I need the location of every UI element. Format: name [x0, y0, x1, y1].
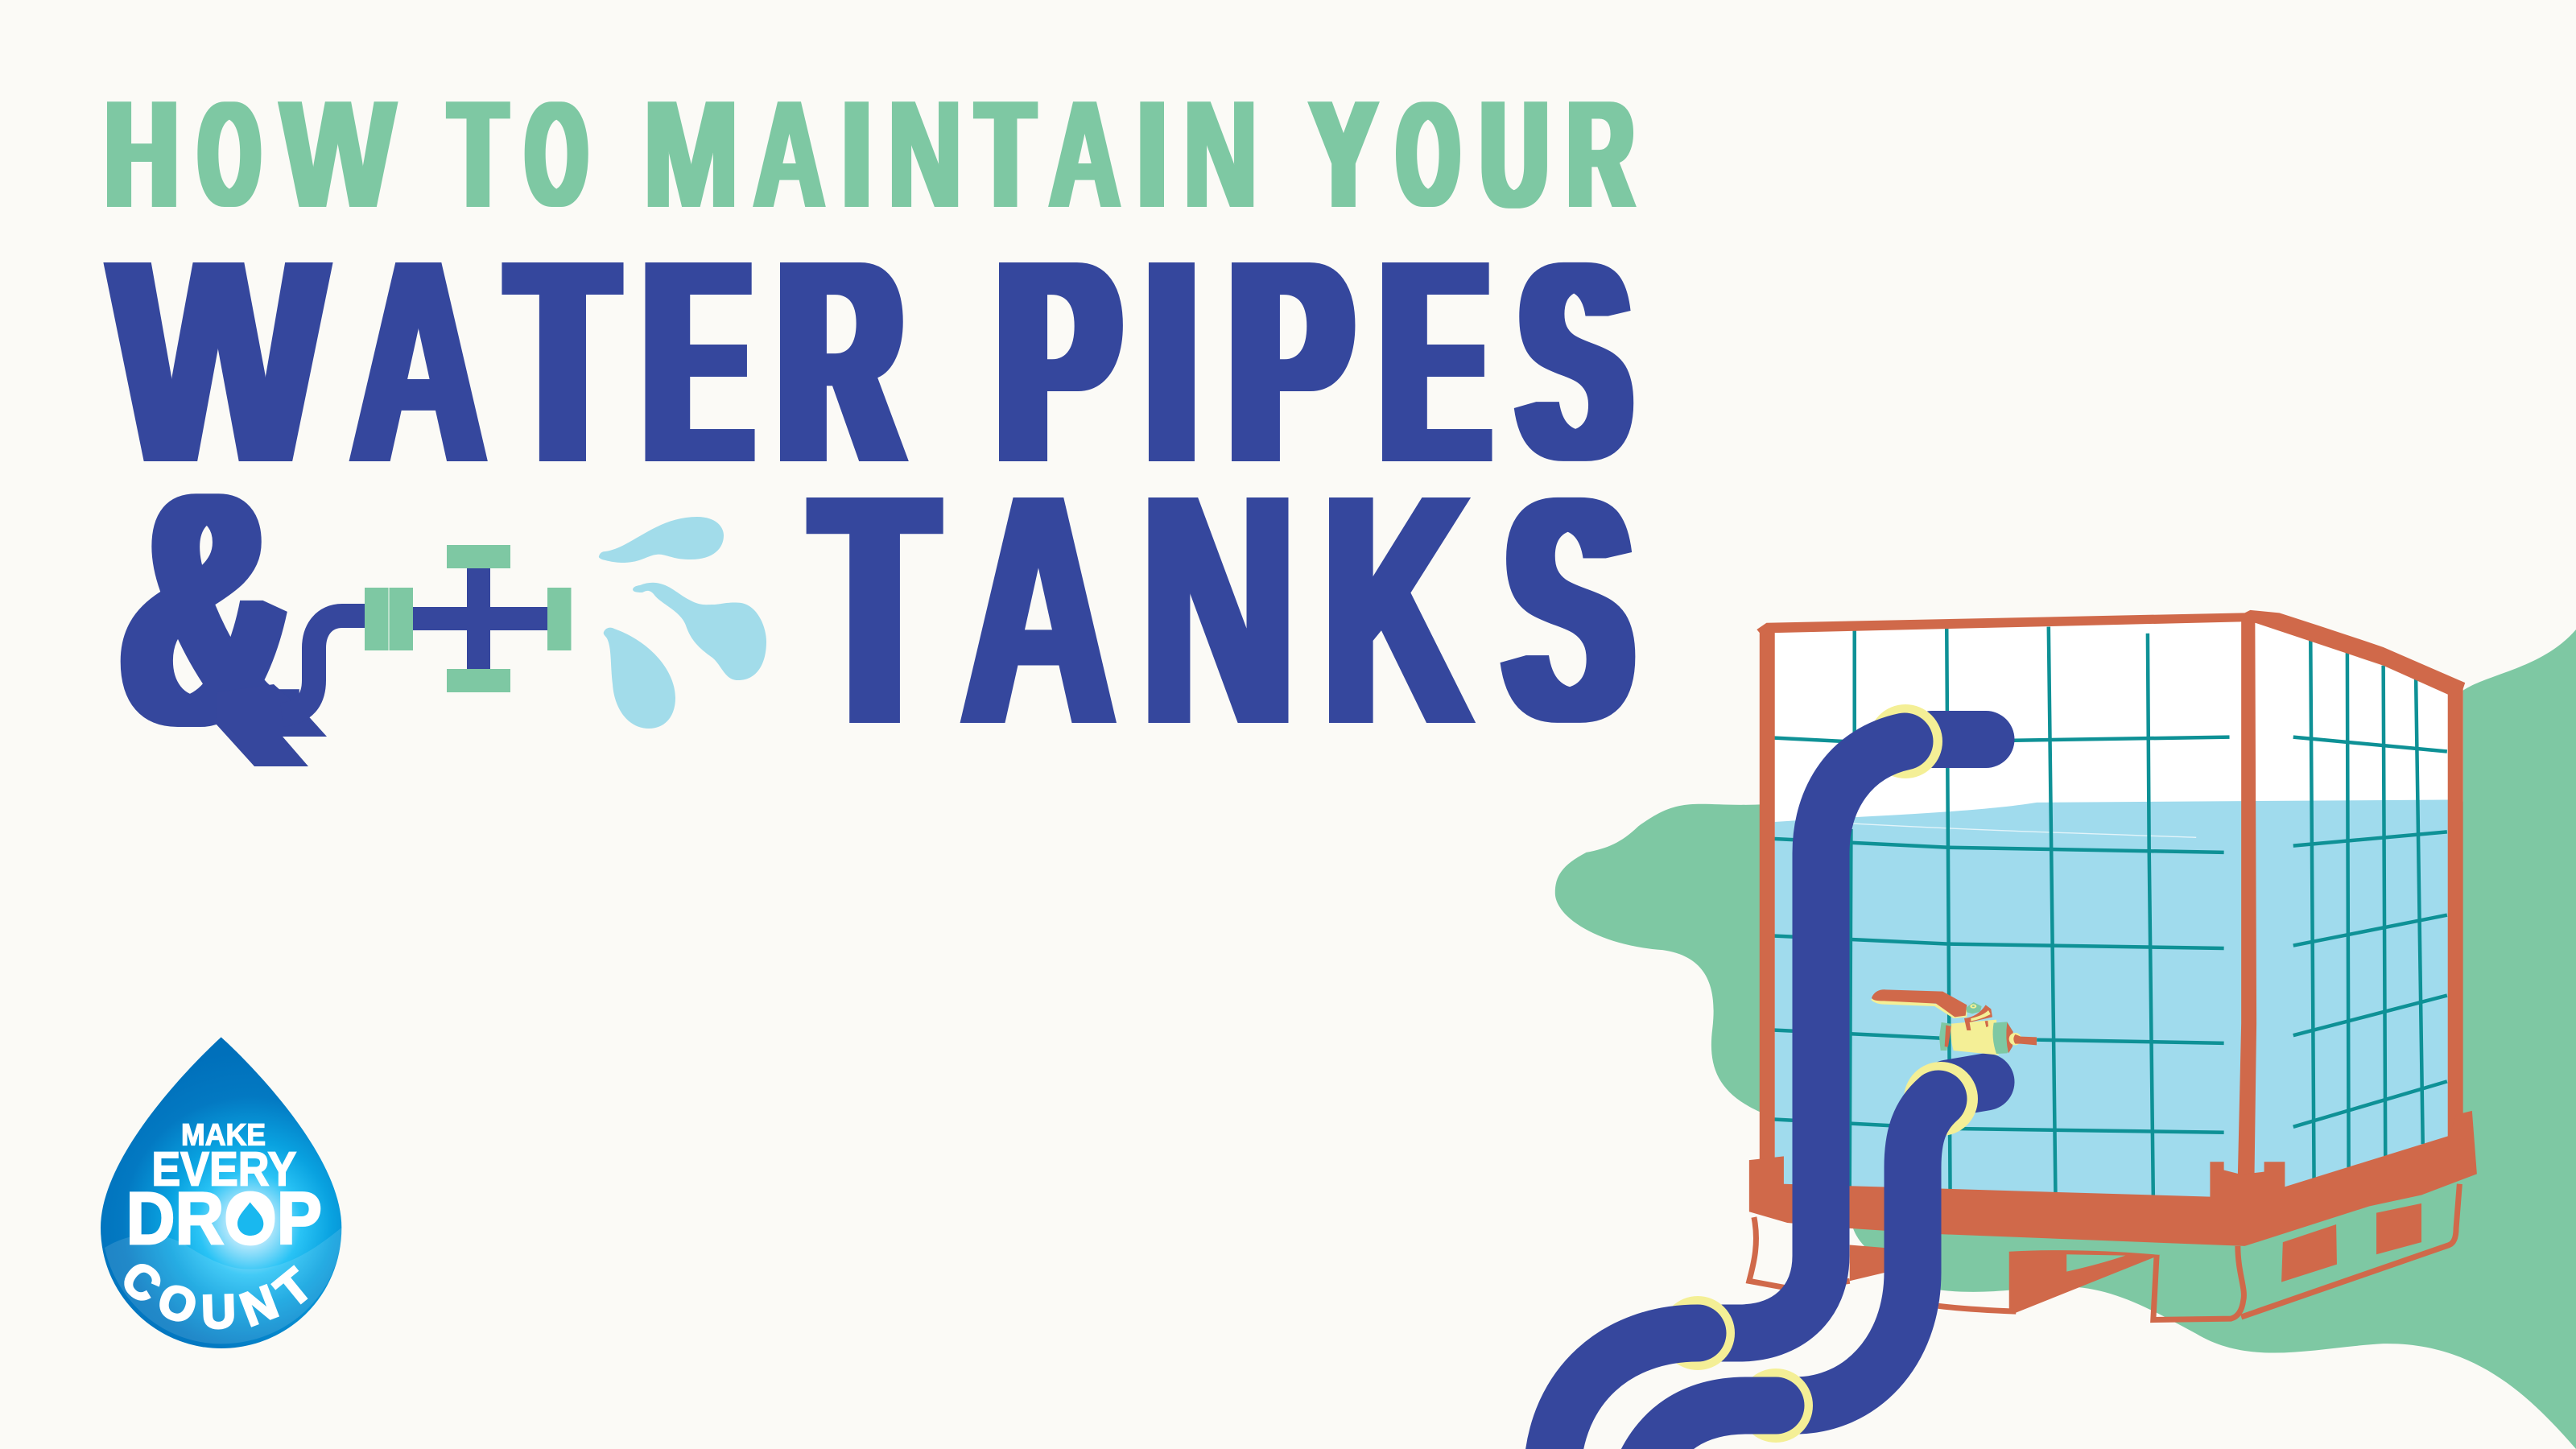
title: how to maintain your: R [1567, 69, 1633, 240]
water highlight [1853, 824, 2196, 837]
badge: make every drop count [101, 1037, 341, 1348]
title: how to maintain your: O [1397, 72, 1459, 237]
title: tanks [815, 426, 1631, 793]
tank white interior [1770, 618, 2449, 827]
illustration: tank and pipes [1552, 610, 2576, 1449]
tank frame and pallet [1749, 610, 2477, 1313]
pipe ring: valve side [1904, 1062, 1978, 1136]
pipe ring: upper [1868, 704, 1942, 778]
pipe ring: lower left [1661, 1296, 1735, 1370]
pallet outlines [1749, 1184, 2459, 1320]
pipe stub: upper [1932, 711, 1986, 768]
title: water pipes: I [1150, 200, 1194, 522]
icon: ball valve [1871, 989, 2037, 1055]
title: how to maintain your: M [643, 68, 739, 240]
green background blob [1555, 630, 2576, 1449]
pipe stub: valve side [1948, 1082, 1986, 1088]
title: water pipes: T [511, 200, 614, 523]
title: how to maintain your: A [753, 68, 825, 239]
badge wave highlight [105, 1228, 341, 1344]
title: water pipes: W [110, 200, 328, 523]
pipe: second main [1779, 1099, 1938, 1406]
title: how to maintain your: N [1183, 69, 1257, 240]
title: water pipes: E [1383, 200, 1487, 523]
badge text: count: COUNT [124, 1264, 308, 1330]
pipe ring: lower right [1739, 1368, 1813, 1443]
icon: ampersand tail [216, 684, 327, 766]
tank body [1749, 610, 2477, 1320]
title: water pipes: P [1231, 200, 1350, 523]
ampersand: & [121, 423, 295, 795]
pipe elbow: lower left [1552, 1333, 1698, 1449]
title: how to maintain your: O [199, 72, 259, 237]
tank cage grid [1769, 627, 2447, 1195]
tank water [1775, 799, 2449, 1198]
pipe: long main [1707, 741, 1905, 1333]
badge o fill [229, 1199, 270, 1237]
title: water pipes: E [646, 200, 749, 523]
badge drop shape [101, 1037, 341, 1348]
pipe elbow: lower right [1640, 1406, 1776, 1449]
title: how to maintain your: H [105, 69, 178, 240]
title: water pipes: R [780, 201, 901, 523]
title: water pipes: A [352, 200, 485, 522]
badge droplet in o [237, 1202, 263, 1236]
title: tanks: A [962, 427, 1115, 793]
badge text: drop: DROP [126, 1178, 322, 1260]
title: how to maintain your: I [1138, 68, 1166, 239]
badge text: every: EVERY [151, 1142, 296, 1196]
title: tanks: T [815, 426, 934, 792]
title: water pipes: P [998, 201, 1118, 523]
title: tanks: K [1323, 427, 1471, 792]
title: how to maintain your: U [1481, 70, 1548, 240]
title: how to maintain your: W [281, 69, 395, 240]
title: tanks: N [1141, 427, 1295, 792]
title: how to maintain your: A [1049, 68, 1121, 239]
title: tanks: S [1506, 431, 1631, 787]
icon: pipe and valve fitting [282, 545, 572, 715]
title: how to maintain your: Y [1311, 68, 1377, 239]
icon: water splashes [599, 517, 766, 729]
title: water pipes: S [1521, 205, 1629, 518]
title: how to maintain your: I [843, 68, 870, 239]
title: how to maintain your [105, 68, 1633, 240]
title: how to maintain your: T [977, 69, 1034, 240]
title: how to maintain your: T [450, 70, 506, 240]
title: how to maintain your: O [526, 72, 587, 237]
badge text: make: MAKE [181, 1118, 266, 1152]
title: water pipes [110, 200, 1629, 523]
title: how to maintain your: N [889, 69, 962, 240]
